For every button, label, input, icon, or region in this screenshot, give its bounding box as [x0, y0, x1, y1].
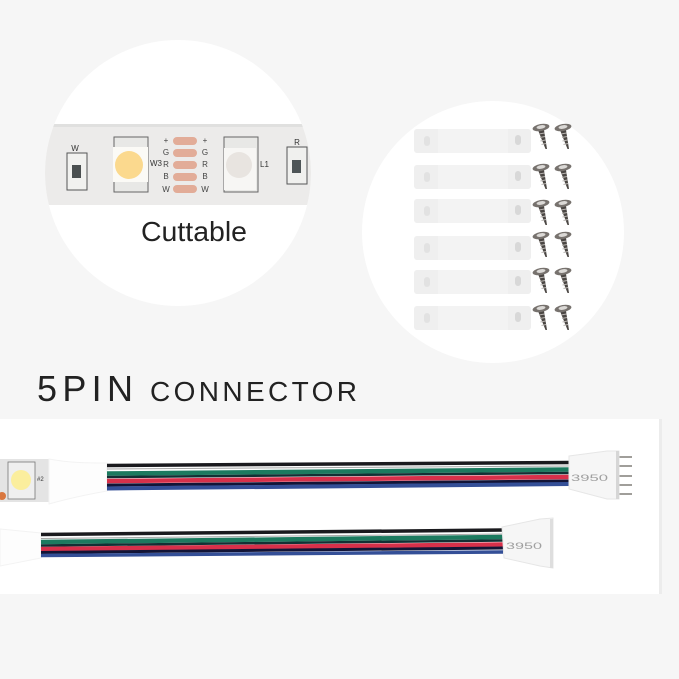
label: Cuttable: Cuttable: [141, 216, 247, 247]
LED right white: L1: [260, 160, 269, 169]
connector housing: [502, 518, 553, 568]
panel: cuttable strip circle: [40, 40, 320, 306]
LED left warm white: [113, 137, 163, 192]
screws: [532, 123, 572, 330]
small resistor W: W: [71, 144, 79, 153]
connector housing with pins: 3950: [571, 473, 608, 483]
copper pads: [162, 136, 209, 194]
small resistor R: R: [294, 138, 300, 147]
wires: [41, 530, 503, 556]
copper pads: G: [202, 148, 208, 157]
small resistor W: [67, 144, 87, 190]
copper pads: +: [203, 136, 208, 145]
copper pads: W: [201, 185, 209, 194]
heading: 5PIN CONNECTOR: 5PIN: [37, 368, 133, 409]
white sleeve: [49, 459, 107, 504]
white sleeve: [0, 529, 41, 566]
LED strip close-up: [40, 124, 320, 205]
copper pads: B: [202, 172, 208, 181]
connector housing with pins: [569, 451, 632, 499]
heading: 5PIN CONNECTOR: [37, 368, 357, 409]
strip end with LED: #2: [37, 477, 44, 483]
top cable: [0, 451, 632, 504]
small resistor R: [287, 138, 307, 184]
copper pads: R: [163, 160, 169, 169]
copper pads: +: [164, 136, 169, 145]
panel: connector photo: [0, 419, 662, 594]
bottom cable: [0, 518, 553, 568]
LED right white: [224, 137, 269, 192]
strip end with LED: [0, 459, 50, 502]
copper pads: B: [163, 172, 169, 181]
connector housing: 3950: [506, 541, 542, 551]
copper pads: W: [162, 185, 170, 194]
clips: [414, 129, 531, 330]
wires: [107, 462, 570, 488]
copper pads: G: [163, 148, 169, 157]
copper pads: R: [202, 160, 208, 169]
panel: clips and screws circle: [362, 101, 624, 363]
LED left warm white: W3: [150, 159, 163, 168]
heading: 5PIN CONNECTOR: CONNECTOR: [150, 376, 357, 407]
